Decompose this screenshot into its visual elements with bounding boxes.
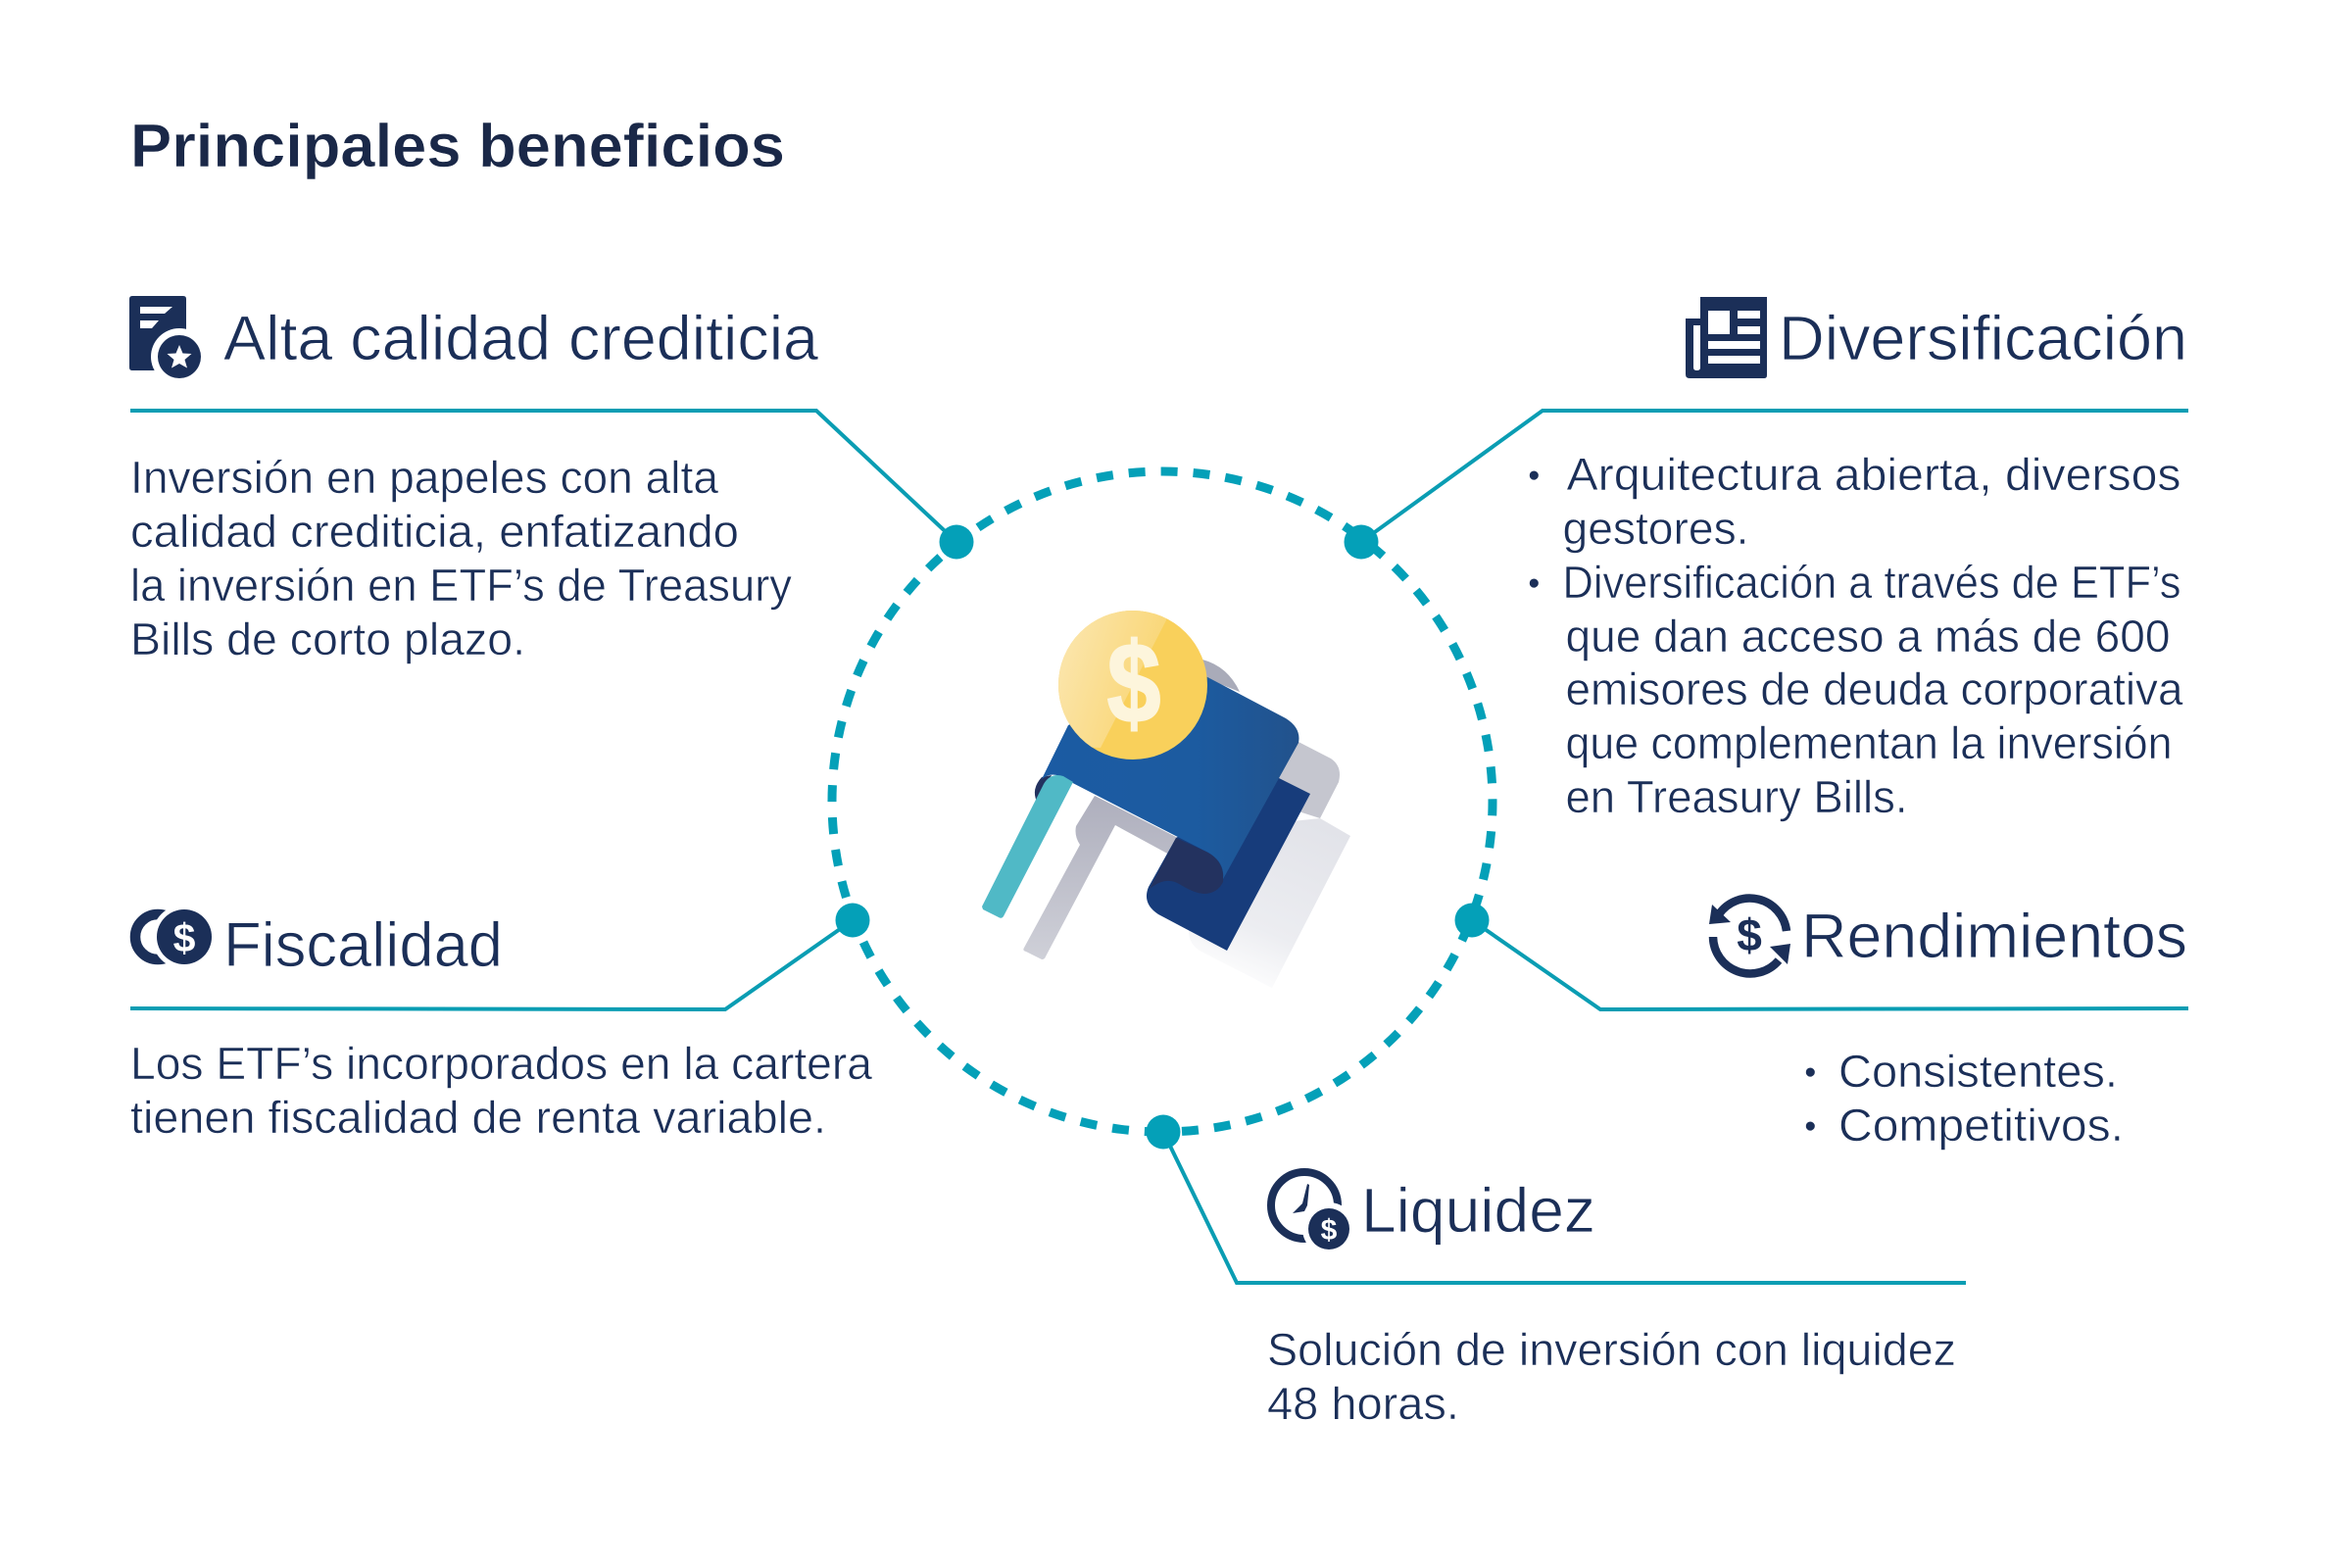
- connector line: [130, 920, 853, 1009]
- body list: [1528, 449, 2183, 822]
- icon: clock with dollar: [1271, 1172, 1355, 1255]
- body text: [130, 452, 792, 664]
- body text: Inversión en papeles con alta: [130, 452, 718, 503]
- connector dot: [1454, 904, 1490, 937]
- heading: Rendimientos: [1801, 901, 2187, 971]
- panel: Fiscalidad: [130, 904, 872, 1143]
- connector line: [1163, 1132, 1966, 1283]
- dark blue back panel: [1147, 777, 1310, 951]
- icon: circular arrows with dollar: $: [1737, 909, 1762, 960]
- icon: circular arrows with dollar: [1709, 899, 1790, 973]
- left fold: [1035, 775, 1052, 802]
- body list: Diversificación a través de ETF’s: [1562, 557, 2181, 608]
- body text: tienen fiscalidad de renta variable.: [130, 1092, 826, 1143]
- heading: Fiscalidad: [223, 909, 503, 980]
- body list: en Treasury Bills.: [1566, 771, 1907, 822]
- heading: Liquidez: [1361, 1175, 1595, 1246]
- gold coin: [1058, 611, 1207, 760]
- connector line: [1472, 920, 2188, 1009]
- icon: coins: [135, 905, 217, 969]
- body list: gestores.: [1562, 503, 1748, 554]
- body text: Solución de inversión con liquidez: [1267, 1324, 1956, 1375]
- body text: Los ETF’s incorporados en la cartera: [130, 1038, 872, 1089]
- icon: document with star: [129, 296, 208, 385]
- icon: clock with dollar: $: [1321, 1214, 1338, 1247]
- body text: la inversión en ETF’s de Treasury: [130, 560, 792, 611]
- panel: Alta calidad crediticia: [129, 296, 974, 664]
- icon: newspaper: [1686, 297, 1767, 378]
- body list: Arquitectura abierta, diversos: [1566, 449, 2181, 500]
- body text: 48 horas.: [1267, 1378, 1459, 1429]
- body text: calidad crediticia, enfatizando: [130, 506, 739, 557]
- panel: Liquidez: [1147, 1115, 1966, 1429]
- body list: emisores de deuda corporativa: [1566, 663, 2183, 714]
- illustration shadow: [1023, 660, 1350, 988]
- body list: [1804, 1046, 2124, 1151]
- panel: Diversificación: [1345, 297, 2188, 822]
- connector line: [130, 411, 956, 542]
- connector dot: [1345, 525, 1378, 559]
- dashed circle: [832, 471, 1493, 1132]
- panel: Rendimientos: [1454, 899, 2188, 1151]
- teal strip: [982, 775, 1073, 918]
- body list: •: [1528, 563, 1541, 603]
- title: Principales beneficios: [130, 113, 785, 180]
- heading: Alta calidad crediticia: [223, 303, 818, 373]
- body list: Consistentes.: [1838, 1046, 2118, 1097]
- body list: que dan acceso a más de 600: [1566, 611, 2170, 662]
- connector line: [1361, 411, 2188, 542]
- connector dot: [1147, 1115, 1180, 1149]
- heading: Diversificación: [1779, 303, 2187, 373]
- body list: •: [1804, 1105, 1817, 1146]
- connector dot: [939, 525, 974, 559]
- blue banner: [1042, 669, 1298, 879]
- body list: Competitivos.: [1838, 1100, 2124, 1151]
- body list: •: [1528, 455, 1541, 495]
- dark fold: [1150, 838, 1223, 894]
- gold coin: $: [1107, 619, 1160, 747]
- connector dot: [835, 904, 870, 937]
- body list: que complementan la inversión: [1566, 717, 2172, 768]
- body list: •: [1804, 1052, 1817, 1092]
- icon: coins: $: [173, 915, 196, 960]
- body text: Bills de corto plazo.: [130, 613, 525, 664]
- central illustration: banknote and coin: [982, 598, 1350, 988]
- body text: [1267, 1324, 1956, 1429]
- body text: [130, 1038, 872, 1143]
